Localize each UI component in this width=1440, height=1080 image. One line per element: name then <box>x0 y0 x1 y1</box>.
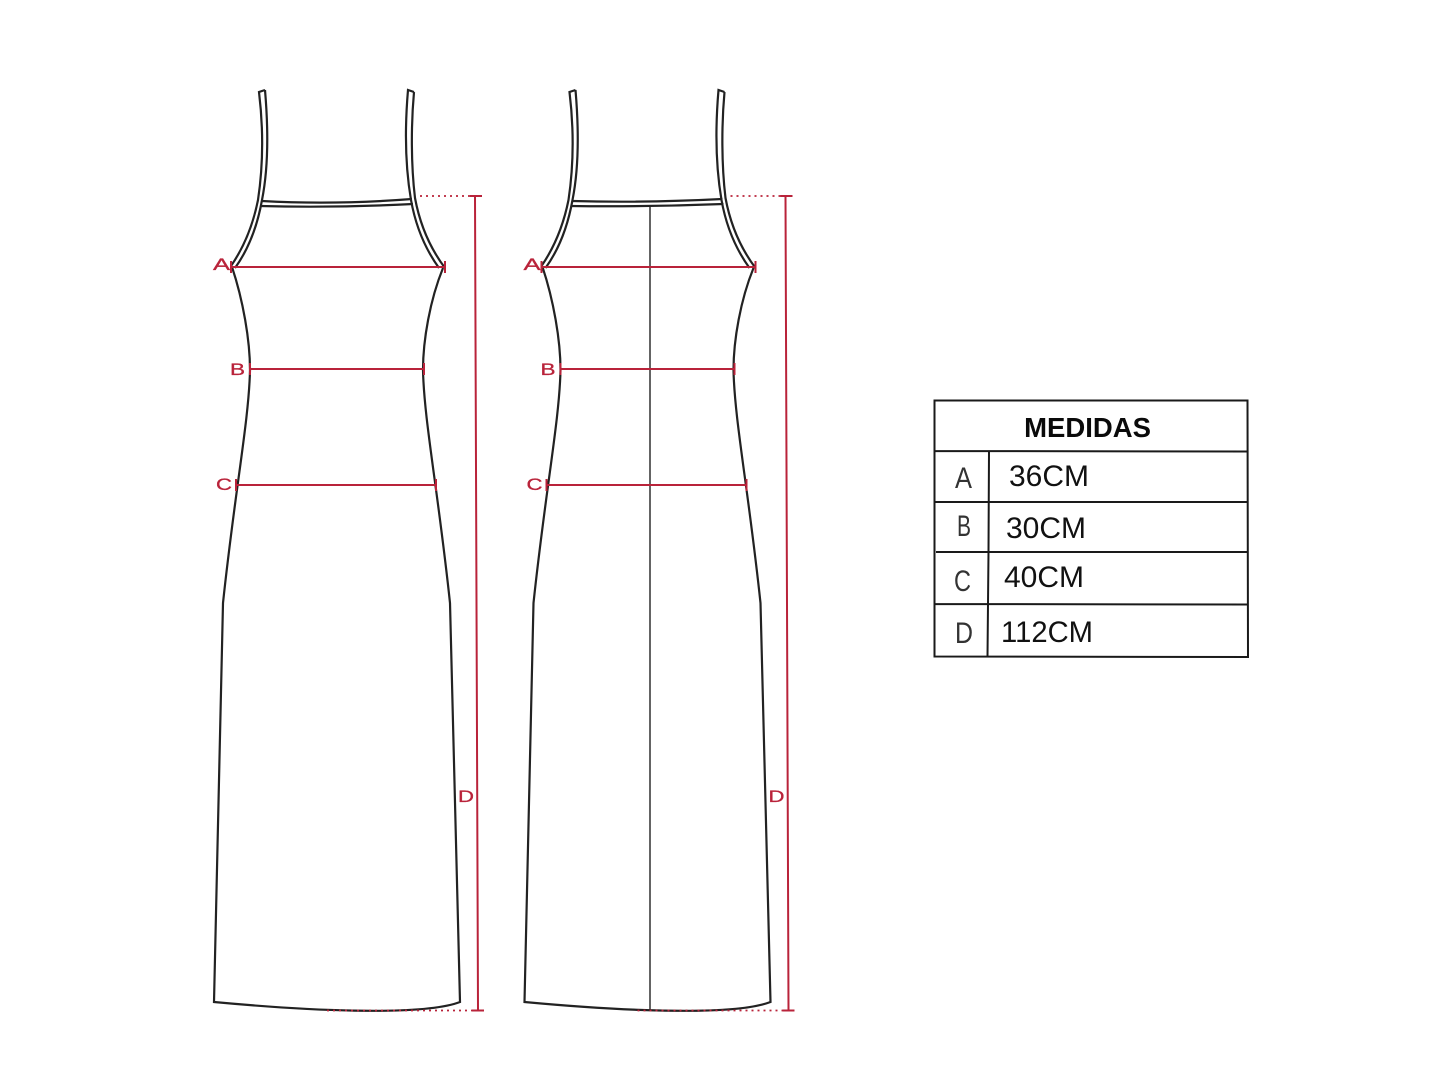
row B: B <box>957 510 971 543</box>
measure D: D <box>768 787 784 806</box>
table title: MEDIDAS <box>1024 412 1151 443</box>
table grid <box>934 400 1248 657</box>
measure A <box>213 255 445 274</box>
measure C: C <box>526 475 542 494</box>
back dress diagram <box>524 90 796 1011</box>
measure B <box>230 360 424 379</box>
front dress outline <box>214 90 460 1011</box>
measure D <box>327 196 485 1010</box>
measure A: A <box>524 255 541 274</box>
row D: D <box>955 617 973 650</box>
front dress diagram <box>213 90 485 1011</box>
measure A <box>524 255 756 274</box>
row C: C <box>954 565 971 598</box>
back dress outline <box>524 90 770 1011</box>
row A: 36CM <box>1009 460 1089 493</box>
measure A: A <box>213 255 231 274</box>
row D: 112CM <box>1001 616 1093 649</box>
measure D: D <box>458 787 474 806</box>
row A: A <box>955 462 972 495</box>
row D <box>955 616 1093 650</box>
row C <box>954 561 1084 598</box>
row A <box>955 460 1089 495</box>
row C: 40CM <box>1004 561 1084 594</box>
measure C <box>216 475 436 494</box>
measure D <box>638 196 796 1010</box>
row B <box>957 510 1086 545</box>
measure B: B <box>540 360 556 379</box>
measure B: B <box>230 360 245 379</box>
measure B <box>540 360 734 379</box>
measure C: C <box>216 475 232 494</box>
row B: 30CM <box>1006 512 1086 545</box>
measurements table <box>934 400 1248 657</box>
measure C <box>526 475 746 494</box>
